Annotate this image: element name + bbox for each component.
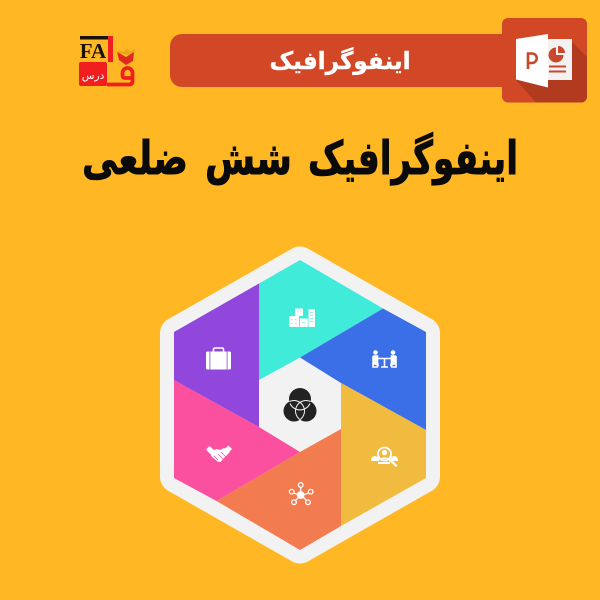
title: ضلعی — [82, 131, 188, 185]
segment: yellow — [341, 383, 426, 526]
title — [82, 131, 518, 185]
title: شش — [205, 131, 292, 185]
icon: overlapping circles — [284, 388, 316, 422]
segment: teal — [259, 260, 383, 380]
segment: purple — [174, 284, 259, 427]
logo: FA dars — [79, 36, 135, 86]
icon: search people — [371, 448, 398, 466]
icon: handshake — [206, 446, 232, 462]
title: اینفوگرافیک — [308, 131, 518, 185]
logo: FA dars: FA — [80, 39, 107, 63]
icon: buildings — [290, 308, 315, 327]
segment: blue — [300, 308, 426, 430]
segment: pink — [174, 380, 300, 501]
icon: PowerPoint — [502, 18, 587, 102]
segment: orange — [216, 429, 341, 550]
hexagon diagram — [174, 260, 426, 550]
outer hexagon frame — [176, 262, 424, 548]
icon: meeting at table — [373, 351, 396, 367]
icon: network — [289, 483, 313, 505]
logo: FA dars: درس — [82, 70, 105, 82]
header ribbon — [170, 34, 510, 87]
icon: briefcase — [206, 348, 231, 370]
header label: اینفوگرافیک — [270, 47, 410, 75]
